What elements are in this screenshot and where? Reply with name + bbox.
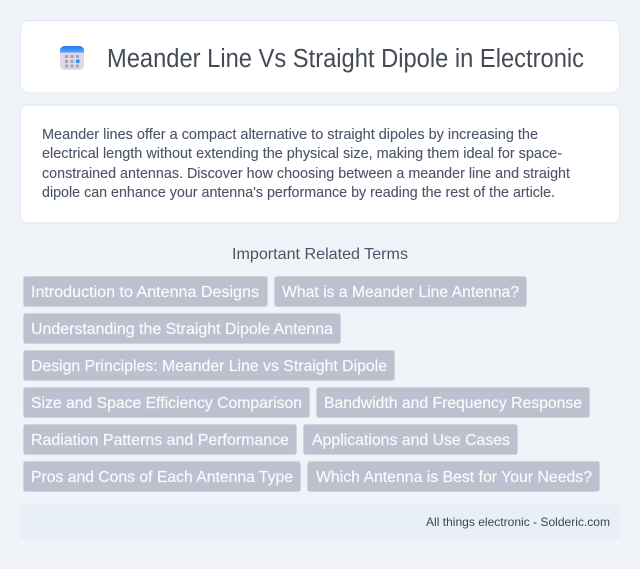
tag: applications: [304, 424, 518, 454]
heading: related terms: Important Related Terms: [232, 246, 408, 263]
text block: intro: electrical length without extending the physical size, making them ideal for space-: [42, 146, 562, 162]
tag: introduction: Introduction to Antenna Designs: [31, 284, 259, 301]
text block: intro: constrained antennas. Discover how choosing between a meander line and straight: [42, 166, 570, 182]
text block: intro: Meander lines offer a compact alternative to straight dipoles by increasing the: [42, 127, 538, 143]
tag: which antenna: Which Antenna is Best for Your Needs?: [316, 469, 592, 486]
icon: calendar: [60, 46, 84, 70]
tag: pros and cons: [24, 462, 300, 492]
tag: size and space: [24, 388, 310, 418]
tag: radiation patterns: [24, 424, 296, 454]
tag: pros and cons: Pros and Cons of Each Antenna Type: [31, 469, 293, 486]
tag: introduction: [24, 276, 268, 306]
tag: what is a meander line: What is a Meander Line Antenna?: [282, 284, 519, 301]
footer: [20, 505, 620, 539]
title: Meander Line Vs Straight Dipole in Electronic: [107, 45, 584, 73]
tag: applications: Applications and Use Cases: [312, 432, 510, 449]
tag: radiation patterns: Radiation Patterns and Performance: [31, 432, 289, 449]
panel: intro text: [20, 105, 620, 223]
tag: which antenna: [308, 462, 600, 492]
text block: intro: [42, 127, 570, 201]
tag: what is a meander line: [274, 276, 526, 306]
tag: straight dipole: Understanding the Straight Dipole Antenna: [31, 321, 333, 338]
tag: bandwidth: [316, 388, 590, 418]
panel: header: [20, 20, 620, 93]
tag group: related terms: [24, 276, 600, 492]
text block: intro: dipole can enhance your antenna's performance by reading the rest of the article.: [42, 185, 555, 201]
tag: design principles: Design Principles: Meander Line vs Straight Dipole: [31, 358, 387, 375]
footer: All things electronic - Solderic.com: [426, 515, 610, 529]
tag: bandwidth: Bandwidth and Frequency Response: [324, 395, 582, 412]
tag: straight dipole: [24, 314, 340, 344]
tag: design principles: [24, 350, 394, 380]
tag: size and space: Size and Space Efficiency Comparison: [31, 395, 302, 412]
